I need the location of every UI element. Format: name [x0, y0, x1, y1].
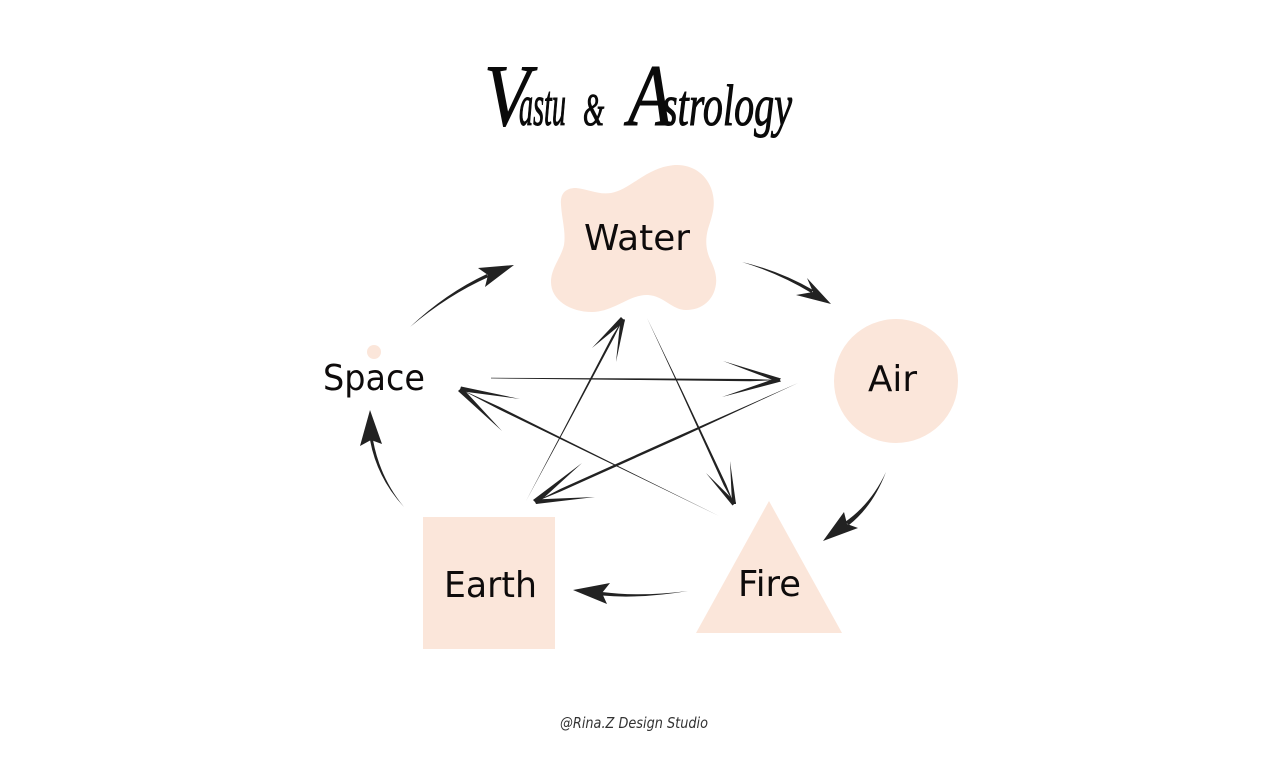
title: &: [583, 84, 611, 135]
water label: Water: [584, 218, 690, 259]
star arrow: to water: [526, 317, 625, 501]
space label: Space: [323, 358, 425, 399]
title: A: [624, 48, 673, 145]
air circle: [834, 319, 958, 443]
arrow: space to water: [410, 265, 514, 327]
star arrow: to earth: [533, 383, 798, 504]
element: space: [323, 345, 425, 399]
element: water: [551, 165, 716, 312]
title: V: [484, 48, 538, 145]
air label: Air: [868, 359, 917, 400]
pentagram star of arrows: [458, 317, 798, 516]
fire label: Fire: [738, 564, 801, 605]
fire triangle: [696, 501, 842, 633]
star arrow: to fire: [647, 318, 736, 506]
title: astu: [519, 73, 573, 138]
earth square: [423, 517, 555, 649]
element: earth: [423, 517, 555, 649]
arrow: air to fire: [823, 472, 886, 541]
footer credit: @Rina.Z Design Studio: [560, 714, 708, 732]
earth label: Earth: [444, 565, 537, 606]
title: strology: [662, 73, 792, 138]
star arrow: to air: [491, 361, 781, 397]
arrow: fire to earth: [573, 583, 688, 604]
star arrow: to space: [458, 386, 719, 516]
element: air: [834, 319, 958, 443]
space dot: [367, 345, 381, 359]
water blob: [551, 165, 716, 312]
element: fire: [696, 501, 842, 633]
arrow: water to air: [742, 262, 831, 304]
arrow: earth to space: [360, 410, 404, 507]
